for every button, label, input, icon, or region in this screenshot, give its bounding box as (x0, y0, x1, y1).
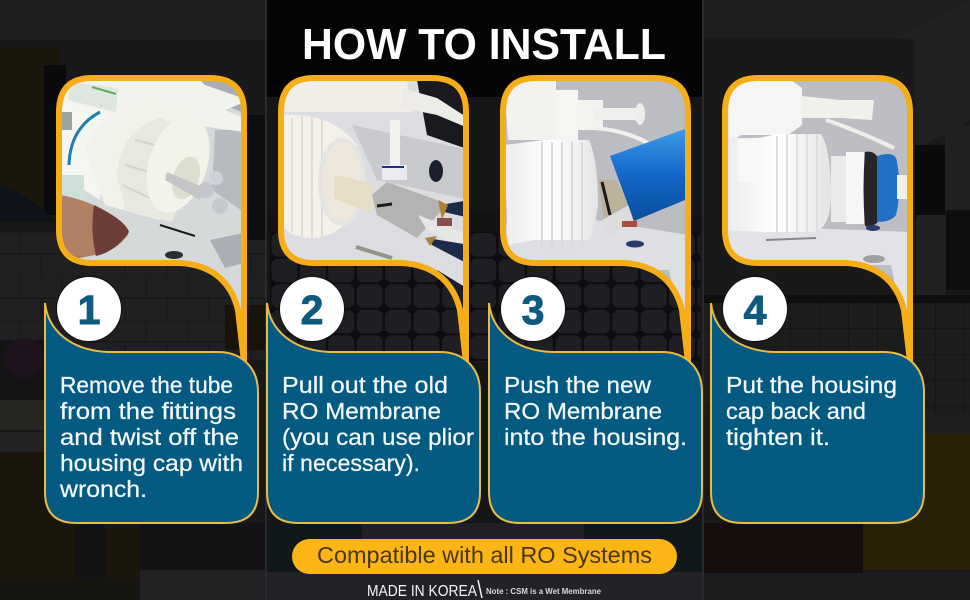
step text: Push the new (504, 372, 651, 398)
photo frame (59, 78, 244, 362)
step text: Put the housing (726, 372, 897, 398)
description box (489, 303, 702, 523)
step text (282, 372, 474, 476)
step text: (you can use plior (282, 424, 474, 450)
step text: RO Membrane (282, 398, 441, 424)
step number badge: 3 (522, 287, 544, 333)
step text: wronch. (59, 476, 147, 502)
step text (504, 372, 687, 450)
step text: RO Membrane (504, 398, 662, 424)
photo: tightening cap (728, 81, 907, 310)
center column backdrop (265, 0, 704, 600)
step number badge: 2 (301, 287, 323, 333)
step text: into the housing. (504, 424, 687, 450)
step text: housing cap with (60, 450, 243, 476)
step text (59, 372, 243, 502)
step text: Pull out the old (282, 372, 448, 398)
footer: made in Korea and note: MADE IN KOREA (367, 583, 478, 600)
title: HOW TO INSTALL (302, 20, 666, 69)
photo: removing housing cap (62, 81, 241, 310)
step text: cap back and (726, 398, 866, 424)
photo frame (503, 78, 688, 362)
description box (711, 303, 924, 523)
step number badge (722, 276, 788, 342)
step text: and twist off the (60, 424, 239, 450)
footer: made in Korea and note (367, 580, 602, 600)
panel: step 1 (45, 75, 258, 523)
step text: if necessary). (282, 450, 420, 476)
compatibility pill (292, 539, 677, 574)
panel: step 4 (711, 75, 924, 523)
step number badge: 4 (744, 287, 767, 333)
step number badge (56, 276, 122, 342)
description box (267, 303, 480, 523)
footer: made in Korea and note: Note : CSM is a Wet Membrane (486, 587, 602, 596)
photo: pulling out membrane (284, 81, 463, 309)
description box (45, 303, 258, 523)
step number badge (279, 276, 345, 342)
compatibility pill: Compatible with all RO Systems (317, 542, 652, 568)
step number badge: 1 (78, 287, 100, 333)
panel: step 3 (489, 75, 702, 523)
photo: pushing new membrane (506, 81, 685, 310)
step text: tighten it. (726, 424, 830, 450)
step number badge (500, 276, 566, 342)
photo frame (725, 78, 910, 362)
step text: from the fittings (60, 398, 236, 424)
step text (726, 372, 897, 450)
panel: step 2 (267, 75, 480, 523)
photo frame (281, 78, 466, 362)
step text: Remove the tube (60, 372, 233, 398)
